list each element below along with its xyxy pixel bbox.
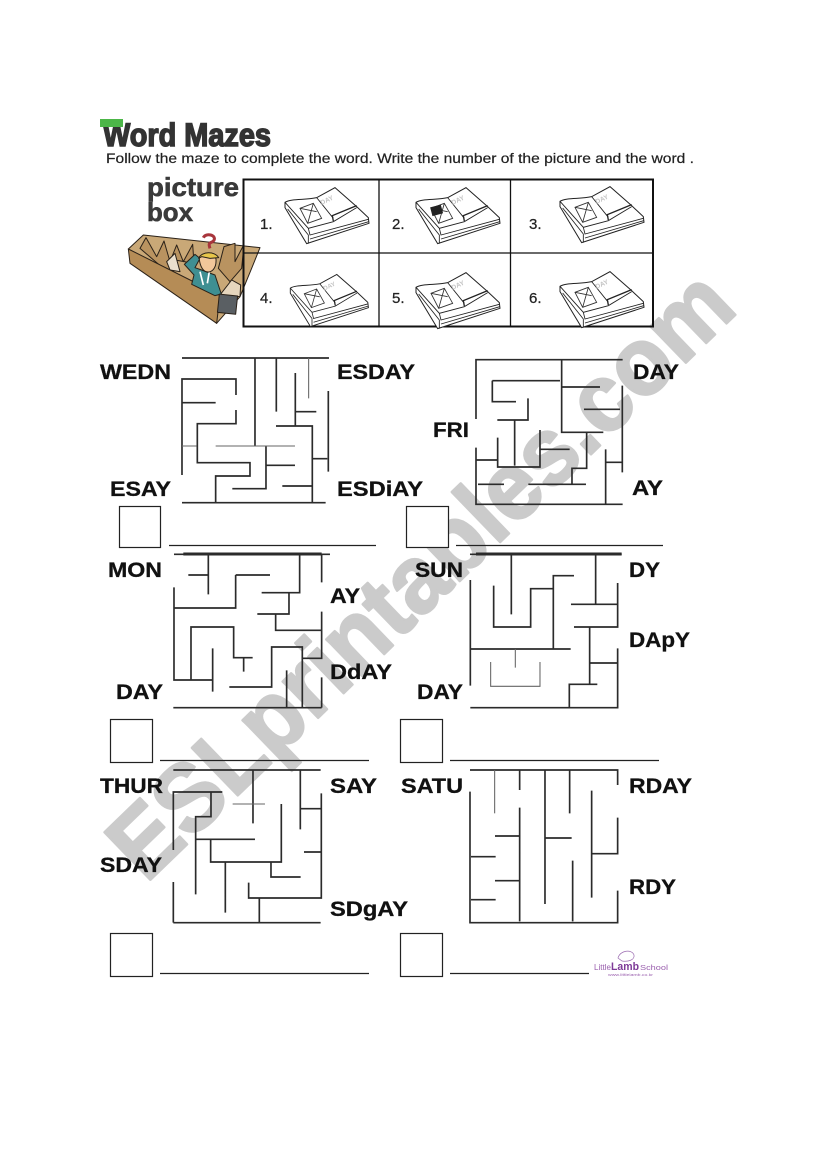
- heading: picture box: [147, 172, 239, 227]
- answer box and line: [120, 506, 376, 548]
- word choices: [401, 775, 692, 899]
- instructions: Follow the maze to complete the word. Write the number of the picture and the word .: [106, 151, 694, 166]
- maze walls: [476, 360, 623, 504]
- logo: Little Lamb School: Little: [594, 963, 612, 972]
- picture 2: 2.: [392, 216, 405, 233]
- picture 4: 4.: [260, 290, 273, 307]
- word choices: SUN: [415, 559, 463, 582]
- word choices: [433, 361, 679, 500]
- word choices: SDgAY: [330, 898, 408, 921]
- maze: Monday: [108, 554, 392, 762]
- maze walls: [470, 770, 618, 923]
- word choices: RDY: [629, 876, 676, 899]
- word choices: DdAY: [330, 661, 392, 684]
- picture 3: [529, 187, 644, 243]
- word choices: [415, 559, 690, 704]
- maze walls: [182, 358, 329, 503]
- maze: Wednesday: [100, 358, 423, 548]
- picture 4: [260, 274, 368, 327]
- maze walls: [173, 554, 330, 708]
- word choices: [108, 559, 392, 704]
- word choices: WEDN: [100, 361, 171, 384]
- picture 2: [392, 188, 500, 244]
- picture 1: [260, 188, 369, 244]
- word choices: DAY: [417, 681, 463, 704]
- picture 3: 3.: [529, 216, 542, 233]
- maze walls: [470, 554, 622, 708]
- word choices: ESDiAY: [337, 478, 423, 501]
- answer box and line: [110, 934, 369, 976]
- word choices: MON: [108, 559, 162, 582]
- answer box and line: [400, 720, 659, 762]
- word choices: ESDAY: [337, 361, 415, 384]
- word choices: RDAY: [629, 775, 692, 798]
- picture box grid: [243, 179, 653, 329]
- word choices: THUR: [100, 775, 163, 798]
- answer box and line: [406, 506, 663, 548]
- logo: Little Lamb School: Lamb: [611, 961, 639, 973]
- word choices: AY: [632, 477, 663, 500]
- word choices: [100, 775, 408, 921]
- maze: Thursday: [100, 770, 408, 976]
- logo: Little Lamb School: [594, 951, 669, 977]
- picture 5: 5.: [392, 290, 405, 307]
- word choices: SAY: [330, 775, 377, 798]
- word choices: AY: [330, 585, 360, 608]
- heading: picture box: picture: [147, 172, 239, 202]
- title: Word Mazes: Word Mazes: [103, 117, 271, 153]
- word choices: ESAY: [110, 478, 171, 501]
- word choices: DApY: [629, 629, 690, 652]
- picture 6: 6.: [529, 290, 542, 307]
- logo: Little Lamb School: www.littlelamb.co.kr: [608, 972, 654, 977]
- word choices: FRI: [433, 419, 469, 442]
- word choices: SATU: [401, 775, 463, 798]
- picture 1: 1.: [260, 216, 273, 233]
- maze: Friday: [406, 360, 679, 548]
- answer box and line: [110, 720, 369, 762]
- maze: Saturday: [400, 770, 692, 976]
- word choices: DY: [629, 559, 660, 582]
- watermark: ESLprintables.com: [86, 249, 754, 899]
- logo: Little Lamb School: School: [640, 965, 669, 972]
- word choices: SDAY: [100, 854, 162, 877]
- word choices: [100, 361, 423, 501]
- illustration: man lost in maze: [128, 235, 260, 323]
- maze walls: [173, 770, 321, 923]
- word choices: DAY: [633, 361, 679, 384]
- answer box and line: [400, 934, 589, 976]
- word choices: DAY: [116, 681, 163, 704]
- picture 6: [529, 272, 644, 328]
- heading: picture box: box: [147, 197, 194, 227]
- maze: Sunday: [400, 554, 690, 762]
- picture 5: [392, 273, 500, 329]
